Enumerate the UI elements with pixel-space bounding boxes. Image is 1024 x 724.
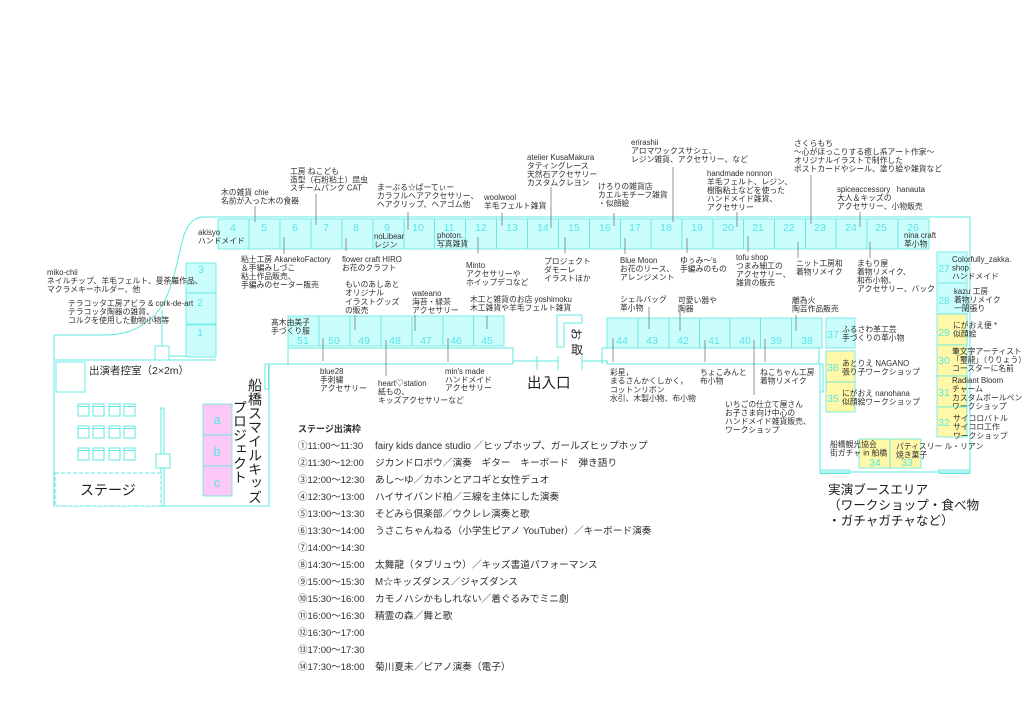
label: AkanekoFactory: 手編みのセーター販売	[241, 280, 319, 290]
booths right column 27-32: 32	[938, 417, 950, 429]
label: nina craft: 革小物	[904, 238, 928, 248]
label: moinoashiato: イラストグッズ	[345, 296, 400, 306]
label: nonnon: アクセサリー	[707, 203, 754, 212]
label: Radiant Bloom: ワークショップ	[952, 402, 1007, 411]
label: yumi: 手編みのもの	[680, 264, 727, 274]
label: nekodomo: 造型（石粉粘土）昆虫	[290, 174, 368, 184]
booths top row 4-26: 14	[537, 222, 549, 234]
booths right column 27-32: 30	[938, 355, 950, 367]
booths top row 4-26: 21	[752, 222, 764, 234]
stage schedule: M☆キッズダンス／ジャズダンス	[375, 575, 518, 588]
booths demo column 35-37: 37	[827, 329, 839, 341]
booths a b c: c	[214, 475, 221, 490]
reception label: 取	[571, 343, 583, 357]
label: KusaMakura: atelier KusaMakura	[527, 153, 594, 162]
label: Minto: アクセサリーや	[466, 270, 521, 278]
label: saikoro: サイコロバトル	[953, 414, 1008, 423]
label: erirashii: レジン雑貨、アクセサリー、など	[631, 154, 748, 164]
stage schedule: ②11:30〜12:00	[298, 458, 364, 469]
label: Radiant Bloom: カスタムボールペン	[952, 393, 1022, 402]
booths top row 4-26: 26	[907, 222, 919, 234]
label: kerori: ・似顔絵	[598, 198, 629, 208]
heading: demo booth area: 実演ブースエリア	[828, 483, 928, 497]
label: nonnon: 羊毛フェルト、レジン、	[707, 176, 792, 186]
label: heart station: 紙もの、	[378, 386, 409, 396]
label: knit: ニット工房和	[796, 259, 843, 268]
label: Minto: ホイップデコなど	[466, 277, 529, 287]
label: nonnon: ハンドメイド雑貨、	[707, 194, 777, 204]
label: mablepartyy: まーぶる☆ぱーてぃー	[377, 183, 454, 192]
label: chie: 木の雑貨 chie	[221, 188, 269, 197]
schedule heading: ステージ出演枠	[298, 423, 361, 434]
booths top row 4-26: 16	[599, 222, 611, 234]
label: cork-de-art: テラコッタ工房アビラ & cork-de-art	[68, 299, 193, 308]
booths top row 4-26: 19	[691, 222, 703, 234]
label: NAGANO: あとりえ NAGANO	[842, 359, 909, 368]
label: kazu: 着物リメイク	[954, 294, 1001, 304]
label: tofu shop: tofu shop	[736, 253, 768, 262]
label: wateano: wateano	[412, 289, 441, 298]
stage	[55, 473, 161, 506]
label: mamoriya: まもり屋	[857, 259, 888, 268]
label: min's made: min's made	[445, 367, 485, 376]
label: saisei: まるさんかくしかく，	[610, 377, 688, 386]
label: yumi: ゆぅみ〜's	[680, 256, 717, 265]
stage schedule: ⑤13:00〜13:30	[298, 509, 365, 520]
booths row 51-45: 50	[328, 335, 340, 347]
label: nina craft: nina craft	[904, 231, 936, 240]
booths row 44-38: 43	[646, 335, 658, 347]
booths 33-34: 34	[869, 457, 881, 469]
stage schedule: そどみら倶楽部／ウクレレ演奏と歌	[375, 507, 530, 520]
label: heart station: heart♡station	[378, 379, 427, 388]
project title vertical: 船橋スマイルキッズ	[247, 378, 263, 504]
label: blue28: blue28	[320, 367, 343, 376]
booths row 51-45	[288, 316, 504, 347]
booths left column 1-3: 3	[198, 264, 204, 276]
booths left column 1-3: 2	[197, 297, 203, 309]
stage schedule	[298, 423, 652, 673]
label: NAGANO: 張り子ワークショップ	[842, 368, 920, 376]
label: nonnon: 樹脂粘土などを使った	[707, 185, 785, 195]
label: shell bag: 革小物	[620, 303, 644, 313]
leader lines	[255, 167, 870, 395]
booths row 44-38	[607, 318, 822, 348]
label: Blue Moon: Blue Moon	[620, 256, 657, 265]
stage schedule: ③12:00〜12:30	[298, 475, 365, 486]
label: fude moji: 「璽龍」（りりょう）	[952, 354, 1024, 364]
booths top row 4-26: 7	[323, 222, 329, 234]
booths top row 4-26: 23	[814, 222, 826, 234]
label: wateano: 海苔・緑茶	[412, 296, 451, 306]
label: nanohana: 似顔絵ワークショップ	[842, 396, 920, 406]
booths top row 4-26: 13	[506, 222, 518, 234]
label: moinoashiato: もいのあしあと	[345, 280, 399, 289]
label: kerori: カエルモチーフ雑貨	[598, 190, 668, 200]
label: KusaMakura: 天然石アクセサリー	[527, 169, 597, 179]
label: min's made: ハンドメイド	[445, 375, 492, 384]
label: nekodomo: 工房 ねこども	[290, 167, 339, 176]
stage schedule: ⑥13:30〜14:00	[298, 526, 365, 537]
label: tourism association: 船橋観光協会	[830, 440, 877, 449]
label: AkanekoFactory: 粘土工房 AkanekoFactory	[241, 255, 331, 264]
label: mamoriya: アクセサリー、バック	[857, 284, 935, 294]
label: fude moji: 筆文字アーティスト	[952, 347, 1022, 356]
equipment squares and waiting room	[56, 346, 170, 506]
booths row 44-38: 40	[739, 335, 751, 347]
label: Colorfully: shop	[952, 264, 970, 272]
label: ichigo: いちごの仕立て屋さん	[725, 400, 803, 409]
label: nonnon: handmade nonnon	[707, 169, 772, 178]
entrance label: 出入口	[527, 375, 570, 392]
booths top row 4-26: 8	[353, 222, 359, 234]
booths demo column 35-37	[826, 318, 855, 412]
label: KusaMakura: タティングレース	[527, 160, 589, 170]
reception label	[569, 328, 583, 357]
label: chokomin: 布小物	[700, 376, 724, 386]
booths row 44-38: 42	[677, 335, 689, 347]
label: nekochan: ねこちゃん工房	[760, 368, 815, 377]
label: nanohana: にがおえ nanohana	[842, 389, 910, 398]
label: damorei: イラストほか	[544, 274, 591, 283]
label: Colorfully: ハンドメイド	[952, 272, 999, 281]
label: damorei: プロジェクト	[544, 257, 591, 266]
label: sakuramochi: さくらもち	[794, 139, 833, 148]
label: nigaoe bin: 似顔絵	[953, 328, 977, 338]
booths a b c: a	[213, 412, 221, 427]
label: Radiant Bloom: チャーム	[952, 385, 983, 394]
label: noLibear: noLibear	[374, 232, 404, 241]
label: ichigo: ハンドメイド雑貨販売、	[725, 416, 811, 426]
venue outline	[54, 217, 970, 506]
stage schedule: 菊川夏未／ピアノ演奏（電子）	[375, 660, 511, 673]
label: mamoriya: 和布小物、	[857, 275, 896, 285]
stage schedule: 太舞龍（タブリュウ）／キッズ書道パフォーマンス	[375, 558, 598, 571]
label: spiceaccessory: 大人＆キッズの	[837, 192, 892, 202]
label: shell bag: シェルバッグ	[620, 295, 667, 304]
label: patisserie: パティスリー ル・リアン	[896, 442, 983, 451]
label: miko-chii: マクラメキーホルダー、他	[47, 284, 140, 294]
label: sakuramochi: ポストカードやシール、塗り絵や雑貨など	[794, 164, 942, 174]
label: akisyo: ハンドメイド	[198, 236, 245, 246]
stage schedule: うさこちゃんねる（小学生ピアノ YouTuber）／キーボード演奏	[375, 524, 652, 537]
stage schedule: fairy kids dance studio ／ヒップホップ、ガールズヒップホップ	[375, 439, 648, 452]
label: kazu: kazu 工房	[954, 287, 988, 296]
stage schedule: ⑬17:00〜17:30	[298, 645, 365, 656]
label: damorei: ダモーレ	[544, 264, 575, 274]
label: saisei: コットンリボン	[610, 385, 665, 394]
label: cute dishes: 陶器	[678, 304, 694, 314]
stage schedule: ⑪16:00〜16:30	[298, 611, 365, 622]
stage schedule: ⑫16:30〜17:00	[298, 628, 365, 639]
booths left column 1-3: 1	[197, 327, 203, 339]
label: chokomin: ちょこみんと	[700, 368, 747, 377]
stage schedule: ハイサイバンド柏／三線を主体にした演奏	[375, 490, 559, 503]
booths demo column 35-37: 36	[827, 362, 839, 374]
label: saisei: 彩星，	[610, 368, 633, 377]
booths demo column 35-37: 35	[827, 393, 839, 405]
label: tofu shop: 雑貨の販売	[736, 278, 775, 288]
booths a b c: b	[213, 444, 221, 459]
label: cork-de-art: コルクを使用した動物小物等	[68, 315, 170, 325]
label: KusaMakura: カスタムクレヨン	[527, 178, 590, 188]
label: furusawa: ふるさわ革工芸	[842, 325, 897, 334]
booths row 51-45: 45	[481, 335, 493, 347]
label: ichigo: ワークショップ	[725, 426, 780, 434]
audience chairs	[78, 404, 135, 460]
label: saisei: 水引、木製小物、布小物	[610, 393, 696, 403]
booths right column 27-32: 28	[938, 295, 950, 307]
label: takagi: 手づくり服	[271, 326, 310, 336]
booths top row 4-26: 25	[875, 222, 887, 234]
label: flower craft: flower craft HIRO	[342, 255, 402, 264]
booths top row 4-26: 12	[475, 222, 487, 234]
booths row 51-45: 51	[297, 335, 309, 347]
booths top row 4-26: 10	[412, 222, 424, 234]
booths row 44-38: 38	[801, 335, 813, 347]
label: Colorfully: Colorfully_zakka.	[952, 255, 1011, 264]
label: saikoro: ワークショップ	[953, 431, 1008, 440]
stage schedule: あし〜ゆ／カホンとアコギと女性デュオ	[375, 473, 549, 486]
label: spiceaccessory: アクセサリー、小物販売	[837, 201, 923, 211]
label: akisyo: akisyo	[198, 228, 220, 237]
label: chie: 名前が入った木の食器	[221, 196, 299, 206]
waiting room label: 出演者控室（2×2m）	[89, 364, 189, 377]
booths right column 27-32: 29	[938, 327, 950, 339]
project title vertical	[232, 378, 263, 504]
label: mamoriya: 着物リメイク、	[857, 266, 911, 276]
label: woolwool: 羊毛フェルト雑貨	[484, 200, 547, 210]
label: cork-de-art: テラコッタ陶器の雑貨、	[68, 306, 154, 316]
label: fude moji: コースターに名前	[952, 363, 1014, 373]
label: wateano: アクセサリー	[412, 306, 459, 315]
booths top row 4-26	[218, 219, 929, 249]
stage schedule: カモノハシかもしれない／着ぐるみでミニ劇	[375, 592, 569, 605]
booths top row 4-26: 22	[783, 222, 795, 234]
label: blue28: アクセサリー	[320, 384, 367, 393]
booths row 44-38: 39	[770, 335, 782, 347]
label: flower craft: お花のクラフト	[342, 262, 397, 272]
stage schedule: 精霊の森／舞と歌	[375, 609, 453, 622]
label: mablepartyy: カラフルヘアアクセサリー、	[377, 192, 478, 200]
booths a b c	[203, 404, 232, 496]
label: kazu: 一閑張り	[954, 304, 985, 313]
booths right column 27-32: 27	[938, 263, 950, 275]
booths top row 4-26: 11	[444, 222, 455, 234]
label: riikabi: 離為火	[792, 296, 815, 305]
label: erirashii: アロマワックスサシェ、	[631, 146, 717, 156]
stage schedule: ①11:00〜11:30	[298, 441, 363, 452]
stage schedule: ジカンドロボウ／演奏 ギター キーボード 弾き語り	[375, 456, 617, 469]
label: miko-chii: miko-chii	[47, 268, 78, 277]
label: Radiant Bloom: Radiant Bloom	[952, 376, 1003, 385]
reception label: お	[569, 328, 583, 340]
label: riikabi: 陶芸作品販売	[792, 304, 839, 314]
label: kerori: けろりの雑貨店	[598, 182, 653, 191]
label: sakuramochi: オリジナルイラストで制作した	[794, 155, 903, 165]
label: Minto: Minto	[466, 261, 485, 270]
label: nigaoe bin: にがおえ便 *	[953, 321, 997, 330]
label: AkanekoFactory: 粘土作品販売、	[241, 271, 296, 281]
label: photon: photon.	[437, 231, 463, 240]
label: nekochan: 着物リメイク	[760, 376, 807, 386]
label: woolwool: woolwool	[484, 193, 516, 202]
label: AkanekoFactory: ＆手編みしづこ	[241, 262, 295, 272]
stage schedule: ⑩15:30〜16:00	[298, 594, 365, 605]
label: yoshimoku: 木工と雑貨のお店 yoshimoku	[470, 295, 572, 304]
booths row 51-45: 48	[389, 335, 401, 347]
label: tofu shop: つまみ細工の	[736, 260, 783, 270]
label: yoshimoku: 木工雑貨や羊毛フェルト雑貨	[470, 303, 572, 313]
stage schedule: ⑭17:30〜18:00	[298, 662, 365, 673]
booths row 44-38: 41	[708, 335, 720, 347]
booths top row 4-26: 24	[845, 222, 857, 234]
label: saikoro: サイコロ工作	[953, 422, 1000, 432]
label: takagi: 髙木由美子	[271, 318, 310, 327]
label: blue28: 手刺繍	[320, 374, 344, 384]
label: patisserie: 焼き菓子	[896, 450, 927, 460]
label: nekodomo: スチームパンク CAT	[290, 184, 362, 193]
stage schedule: ④12:30〜13:00	[298, 492, 365, 503]
booths top row 4-26: 5	[261, 222, 267, 234]
label: moinoashiato: オリジナル	[345, 289, 384, 298]
booths top row 4-26: 4	[230, 222, 236, 234]
booths right column 27-32: 31	[938, 387, 950, 399]
label: Blue Moon: お花のリース、	[620, 264, 674, 274]
label: Blue Moon: アレンジメント	[620, 273, 675, 282]
label: sakuramochi: 〜心がほっこりする癒し系アート作家〜	[794, 146, 935, 156]
booths top row 4-26: 20	[722, 222, 734, 234]
label: tofu shop: アクセサリー、	[736, 270, 790, 279]
booths top row 4-26: 6	[292, 222, 298, 234]
label: noLibear: レジン	[374, 240, 398, 250]
booths right column 27-32	[937, 252, 967, 437]
booths top row 4-26: 18	[660, 222, 672, 234]
booths row 51-45: 46	[450, 335, 462, 347]
label: cute dishes: 可愛い器や	[678, 296, 717, 305]
label: heart station: キッズアクセサリーなど	[378, 395, 464, 405]
label: photon: 写真雑貨	[437, 238, 468, 248]
booths left column 1-3	[186, 263, 216, 357]
heading: demo booth area: ・ガチャガチャなど）	[828, 514, 954, 528]
label: furusawa: 手づくりの革小物	[842, 332, 905, 342]
booths row 51-45: 49	[358, 335, 370, 347]
label: min's made: アクセサリー	[445, 384, 492, 393]
booths 33-34: 33	[901, 457, 913, 469]
label: knit: 着物リメイク	[796, 266, 843, 276]
booths top row 4-26: 9	[384, 222, 390, 234]
label: ichigo: お子さま向け中心の	[725, 408, 795, 418]
stage schedule: ⑦14:00〜14:30	[298, 543, 365, 554]
label: erirashii: erirashii	[631, 138, 658, 147]
booths top row 4-26: 17	[629, 222, 641, 234]
label: mablepartyy: ヘアクリップ、ヘアゴム他	[377, 199, 471, 209]
stage schedule: ⑧14:30〜15:00	[298, 560, 365, 571]
label: tourism association: 街ガチャ in 船橋	[830, 448, 887, 458]
stage schedule: ⑨15:00〜15:30	[298, 577, 365, 588]
booths row 51-45: 47	[420, 335, 432, 347]
label: miko-chii: ネイルチップ、羊毛フェルト、曼荼羅作品、	[47, 276, 203, 286]
project title vertical: プロジェクト	[232, 400, 248, 484]
heading: demo booth area: （ワークショップ・食べ物	[828, 498, 979, 512]
booths top row 4-26: 15	[568, 222, 580, 234]
booths 33-34	[859, 439, 921, 469]
label: spiceaccessory: spiceaccessory hanauta	[837, 185, 925, 194]
stage: ステージ	[80, 482, 136, 498]
booths row 44-38: 44	[616, 335, 628, 347]
label: moinoashiato: の販売	[345, 305, 369, 315]
